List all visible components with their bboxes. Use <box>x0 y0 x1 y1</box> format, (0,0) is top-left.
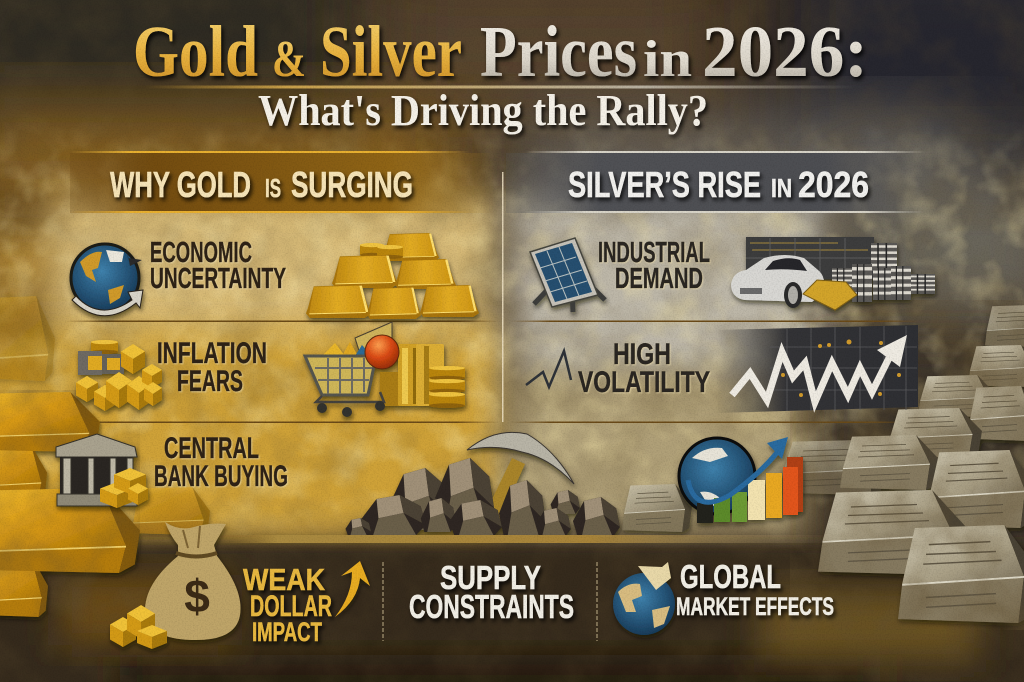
panel header: gold: WHY GOLD <box>110 164 251 205</box>
label: supply constraints <box>409 559 574 625</box>
icon: money bag: $ <box>184 570 210 622</box>
center divider <box>502 172 504 422</box>
icon: shopping cart <box>305 322 465 417</box>
label: industrial demand: INDUSTRIAL <box>598 237 710 269</box>
title: Silver <box>320 11 462 92</box>
label: central bank buying: BANK BUYING <box>154 460 288 493</box>
bottom dividers <box>383 562 597 641</box>
panel header: gold <box>70 151 495 213</box>
icon: gold blocks inflation <box>76 340 162 411</box>
icon: globe and bar chart <box>679 437 803 523</box>
label: inflation fears: INFLATION <box>157 337 267 370</box>
subtitle: What's Driving the Rally? <box>258 86 708 135</box>
label: economic uncertainty: ECONOMIC <box>150 237 252 269</box>
icon: globe bottom <box>613 562 675 635</box>
label: global market effects: GLOBAL <box>680 558 781 595</box>
panel header: silver <box>506 151 931 213</box>
icon: car, chart and silver stacks <box>731 237 935 310</box>
row dividers <box>65 320 920 423</box>
label: central bank buying: CENTRAL <box>164 432 259 465</box>
label: inflation fears <box>157 337 267 398</box>
label: industrial demand: DEMAND <box>615 263 703 295</box>
pile texture <box>0 300 1024 630</box>
panel header: silver: 2026 <box>798 164 869 205</box>
label: global market effects: MARKET EFFECTS <box>676 593 834 621</box>
label: supply constraints: CONSTRAINTS <box>409 588 574 625</box>
title: & <box>272 31 306 88</box>
label: high volatility <box>578 338 710 399</box>
icon: globe economic uncertainty <box>71 244 143 316</box>
label: inflation fears: FEARS <box>177 365 243 398</box>
icon: solar panel <box>530 238 605 312</box>
label: weak dollar impact: WEAK <box>243 562 326 597</box>
panel header: silver: SILVER’S RISE <box>568 164 761 205</box>
arrow: weak dollar up <box>335 561 370 617</box>
title: Prices <box>480 11 637 92</box>
panel header: silver: IN <box>771 173 792 203</box>
icon: small volatility line <box>526 351 571 387</box>
icon: gold bar stack <box>306 233 479 319</box>
title: 2026: <box>702 11 868 92</box>
label: high volatility: HIGH <box>613 338 671 371</box>
label: weak dollar impact: DOLLAR <box>250 590 332 623</box>
panel header: gold: IS <box>265 173 281 203</box>
icon: bank <box>56 434 148 508</box>
chart: volatility <box>716 325 918 413</box>
icon: money bag <box>110 522 241 649</box>
title: in <box>643 31 692 88</box>
icon: ore and pickaxe <box>346 432 620 537</box>
title rule <box>145 86 855 88</box>
title <box>133 11 868 92</box>
label: weak dollar impact: IMPACT <box>252 617 322 647</box>
label: supply constraints: SUPPLY <box>440 559 541 596</box>
label: economic uncertainty <box>150 237 286 295</box>
label: high volatility: VOLATILITY <box>578 366 710 399</box>
label: industrial demand <box>598 237 710 295</box>
gold bars pile left <box>0 296 210 617</box>
label: economic uncertainty: UNCERTAINTY <box>150 263 286 295</box>
silver bars pile right <box>622 305 1024 623</box>
bottom bar <box>215 535 835 543</box>
panel header: gold: SURGING <box>291 164 413 205</box>
label: weak dollar impact <box>243 562 332 647</box>
label: global market effects <box>676 558 834 621</box>
title: Gold <box>133 11 258 92</box>
label: central bank buying <box>154 432 288 493</box>
